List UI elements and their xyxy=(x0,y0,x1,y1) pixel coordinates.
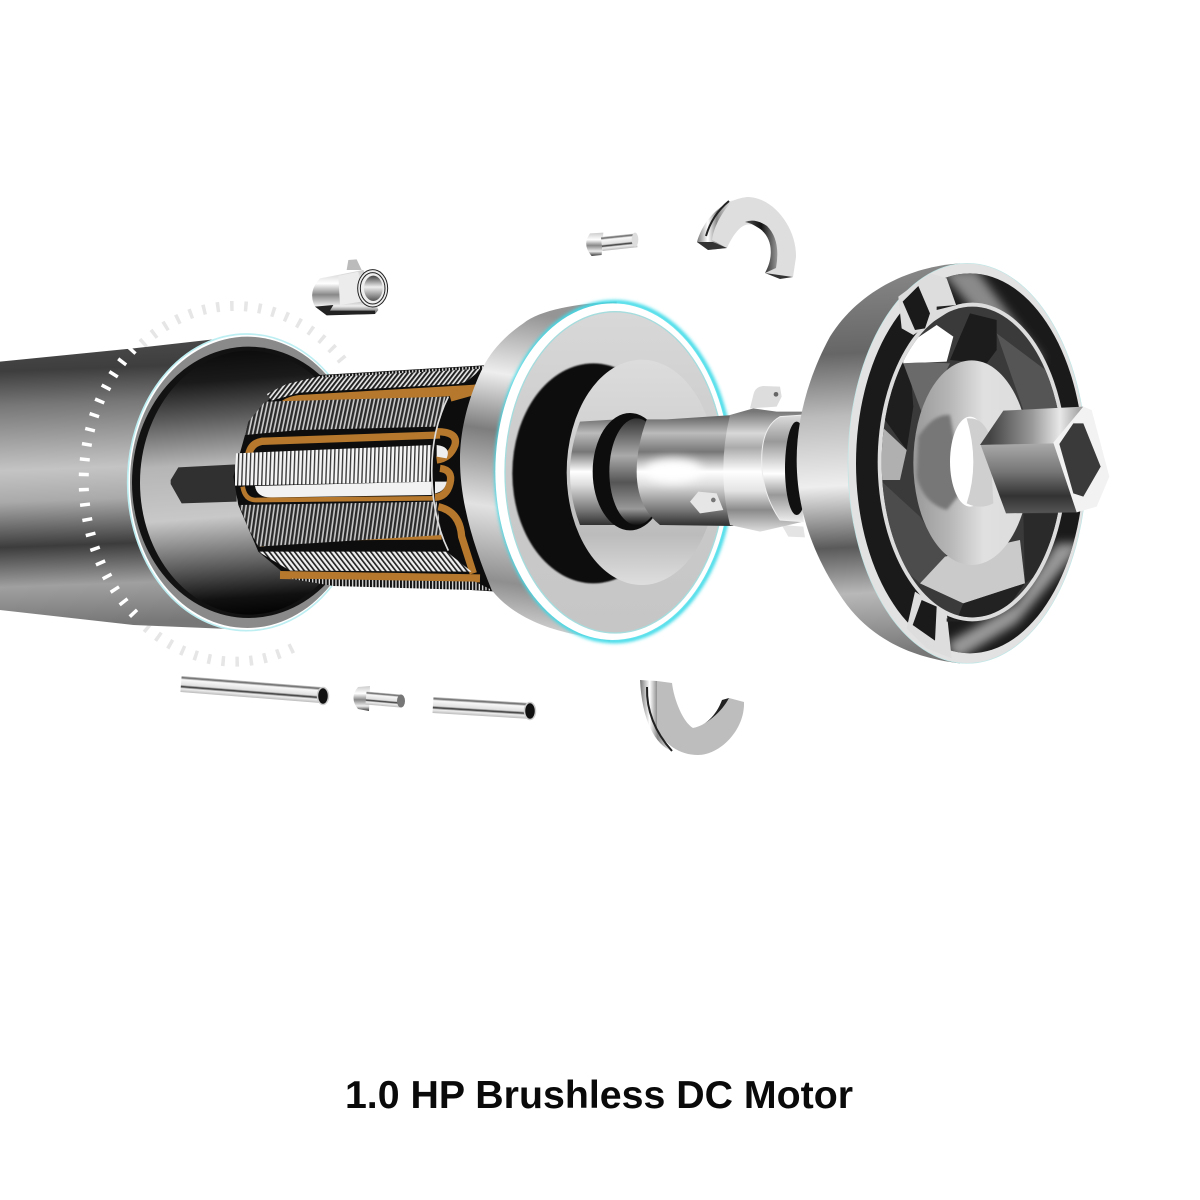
centre hole xyxy=(950,417,990,507)
fan end plate xyxy=(797,263,1109,663)
faint outer tick ring xyxy=(142,306,347,662)
dark recess xyxy=(512,363,674,583)
small pin top xyxy=(586,233,638,256)
bottom C bracket xyxy=(640,680,744,755)
fan blades xyxy=(882,306,1058,618)
fan side band xyxy=(797,263,960,663)
collar band xyxy=(723,408,803,532)
disc face xyxy=(505,312,725,633)
collar tabs xyxy=(750,386,782,408)
short tube xyxy=(433,697,536,720)
short pin bottom xyxy=(354,686,405,711)
fan spokes and slots xyxy=(898,273,957,335)
long tube xyxy=(180,676,328,704)
white tick ring over housing xyxy=(84,349,138,618)
bearing ring xyxy=(762,415,803,522)
fan dark ring xyxy=(856,273,1084,653)
hub plate xyxy=(567,360,717,585)
shaft body xyxy=(637,415,733,526)
fan centre disc xyxy=(913,360,1030,565)
title: 1.0 HP Brushless DC Motor xyxy=(345,1073,853,1117)
lamination strips xyxy=(267,367,483,401)
cyan glow ring xyxy=(497,302,731,641)
central shaft with collar xyxy=(570,386,808,537)
shaft stub xyxy=(171,464,237,503)
copper windings xyxy=(243,389,480,578)
end bell disc with cyan ring xyxy=(460,302,731,642)
disc side band xyxy=(460,302,617,642)
fan inner ring xyxy=(878,303,1067,621)
exploded motor illustration xyxy=(0,197,1110,755)
fan outer face xyxy=(848,263,1087,663)
white window xyxy=(255,482,432,497)
lower tab xyxy=(690,492,723,513)
stator with copper windings xyxy=(233,365,497,592)
hex drive bar xyxy=(980,407,1083,445)
bearing cartridge xyxy=(312,259,388,315)
top C bracket xyxy=(697,197,796,279)
motor housing cylinder xyxy=(0,334,366,631)
winding end turns xyxy=(435,388,480,573)
